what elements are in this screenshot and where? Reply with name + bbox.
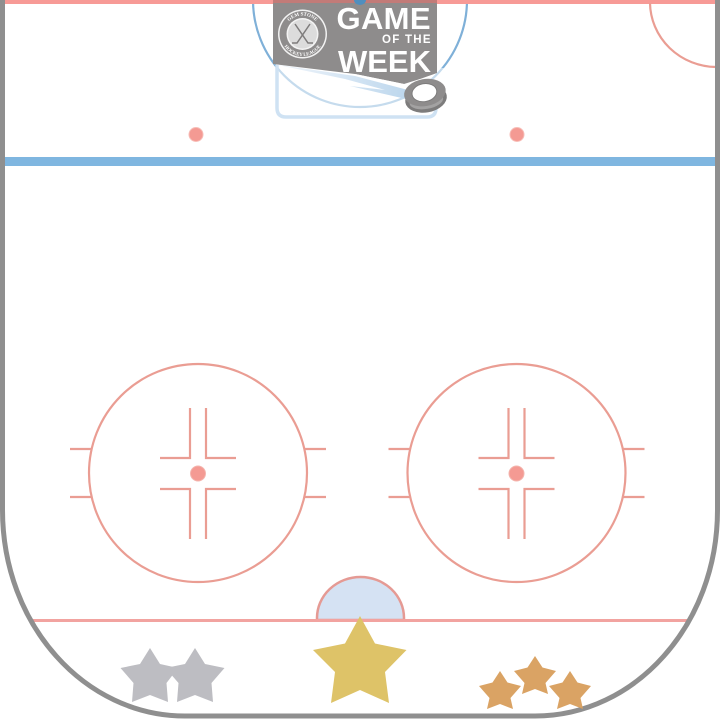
heading: week: WEEK [338, 44, 432, 79]
top line over banner [273, 0, 437, 3]
bottom goal line [32, 619, 689, 622]
game of the week logo [273, 0, 447, 113]
blue line [4, 157, 716, 166]
left face-off circle [70, 364, 326, 582]
icon: puck [402, 76, 449, 116]
goal crease circle [253, 0, 467, 107]
corner face-off arc [650, 3, 716, 67]
bronze stars [479, 656, 591, 709]
league seal: HOCKEY LEAGUE [284, 44, 320, 56]
banner [273, 3, 437, 84]
top goal line [0, 0, 720, 4]
heading: of the: OF THE [382, 34, 431, 46]
gold star [313, 616, 406, 703]
league seal: GEM STONE [288, 12, 318, 21]
right face-off circle [388, 364, 644, 582]
neutral zone dots [189, 128, 524, 142]
puck trail [273, 64, 408, 99]
goal marker [354, 0, 366, 5]
league seal [278, 10, 327, 58]
lower arc fade and goal box [272, 65, 448, 117]
bottom goal crease [317, 577, 404, 620]
silver stars [120, 648, 224, 702]
heading: game: GAME [336, 1, 430, 36]
